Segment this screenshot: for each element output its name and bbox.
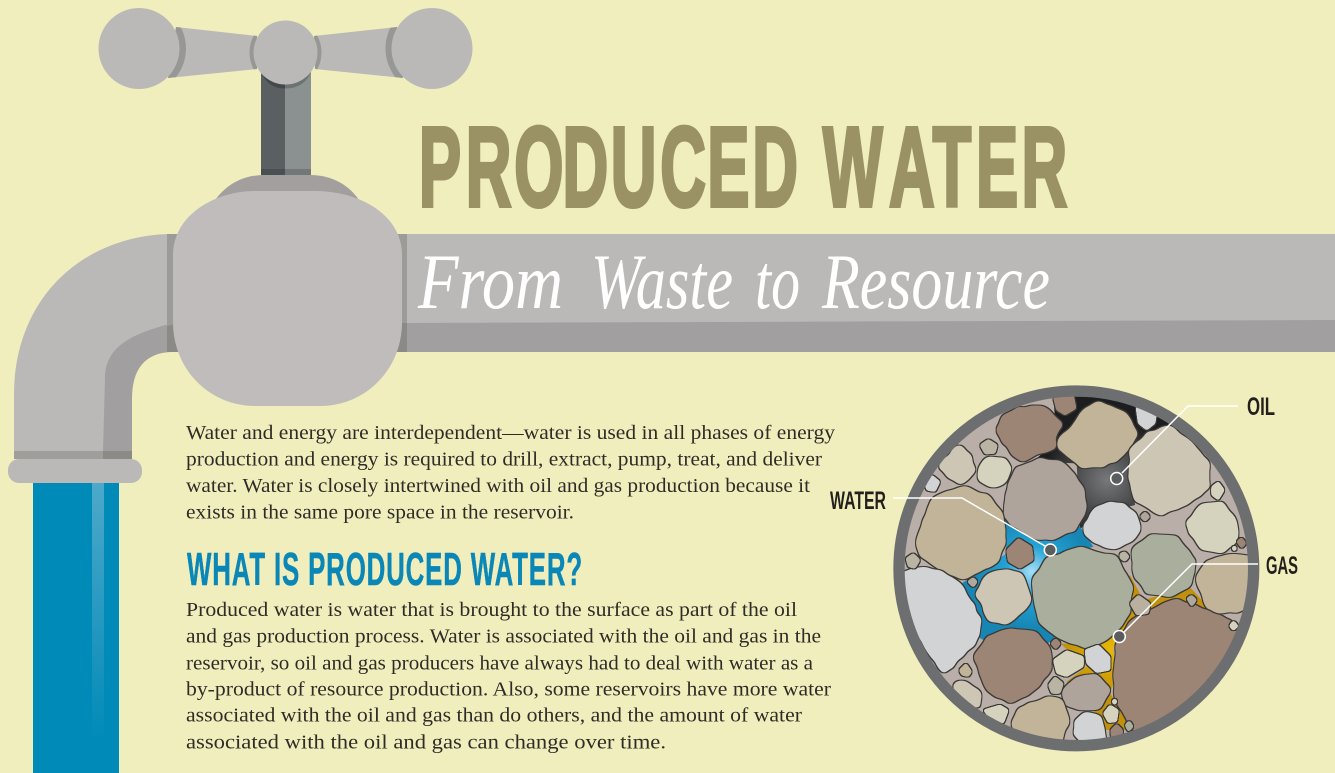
definition paragraph: reservoir, so oil and gas producers have always had to deal with water as a — [186, 653, 813, 674]
definition paragraph: associated with the oil and gas can change over time. — [186, 732, 666, 753]
intro paragraph: exists in the same pore space in the reservoir. — [186, 502, 574, 523]
definition paragraph: Produced water is water that is brought to the surface as part of the oil — [186, 600, 798, 621]
subtitle: Waste — [591, 238, 733, 325]
subtitle: to — [755, 238, 800, 325]
reservoir rock diagram — [897, 391, 1255, 748]
intro paragraph: production and energy is required to drill, extract, pump, treat, and deliver — [186, 450, 823, 471]
callout: water — [830, 487, 1056, 556]
definition paragraph: by-product of resource production. Also, some reservoirs have more water — [186, 680, 832, 701]
water stream — [33, 480, 119, 773]
large rock grains — [897, 401, 1255, 748]
intro paragraph: water. Water is closely intertwined with oil and gas production because it — [186, 476, 811, 497]
subtitle: Resource — [821, 238, 1050, 325]
callout: gas: GAS — [1266, 552, 1298, 580]
faucet pipe — [8, 234, 1335, 483]
title: PRODUCED WATER — [419, 105, 1067, 231]
callout: oil — [1111, 393, 1275, 484]
callout: gas — [1113, 552, 1298, 642]
intro paragraph — [186, 423, 835, 523]
gas pore — [1060, 575, 1218, 730]
faucet handle — [94, 2, 478, 175]
subtitle — [417, 238, 1050, 325]
callout: water: WATER — [830, 487, 886, 515]
water pore — [962, 520, 1093, 643]
definition paragraph — [186, 600, 832, 753]
small rock grains — [906, 395, 1246, 738]
faucet body — [173, 175, 402, 406]
subtitle: From — [417, 238, 563, 325]
oil pore — [1033, 397, 1170, 530]
definition paragraph: and gas production process. Water is associated with the oil and gas in the — [186, 626, 821, 647]
heading: what is produced water: WHAT IS PRODUCED WATER? — [187, 543, 583, 595]
intro paragraph: Water and energy are interdependent—water is used in all phases of energy — [186, 423, 835, 444]
definition paragraph: associated with the oil and gas than do others, and the amount of water — [186, 706, 803, 727]
callout: oil: OIL — [1247, 393, 1275, 421]
